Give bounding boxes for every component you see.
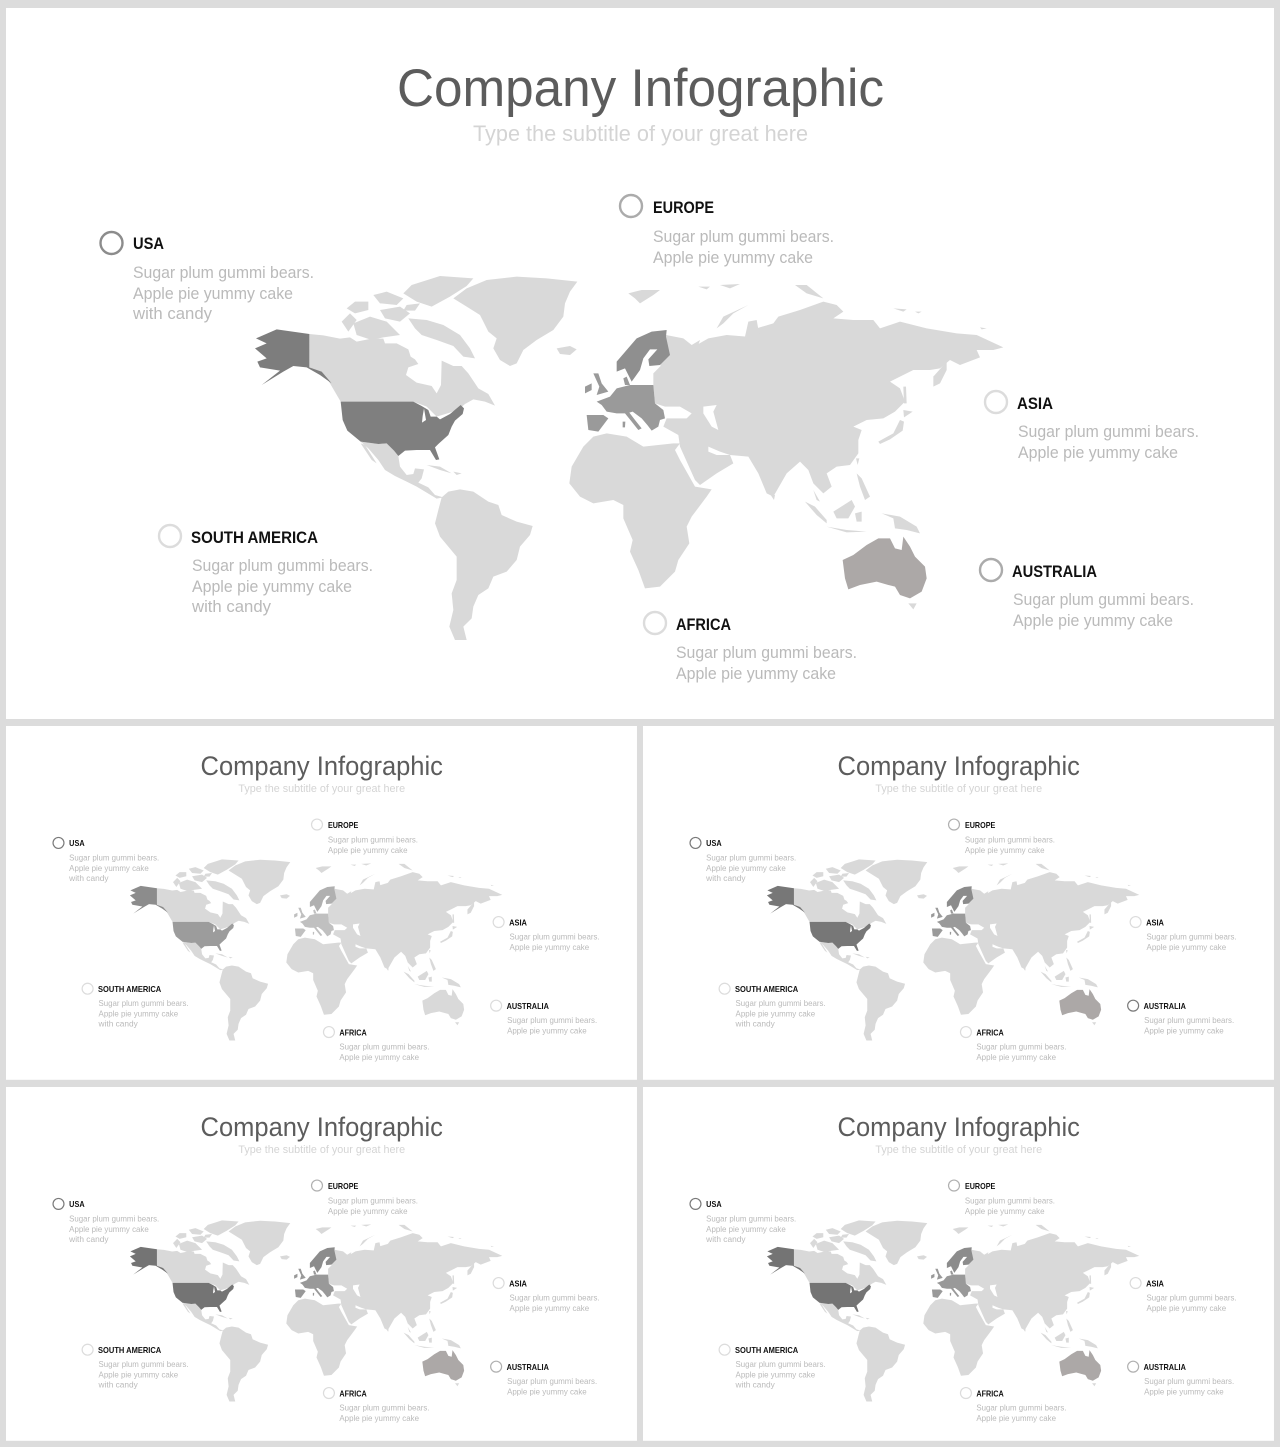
callout: Africa: Sugar plum gummi bears. <box>976 1402 1066 1412</box>
callout: Asia: Sugar plum gummi bears. <box>1147 931 1237 941</box>
callout: South America: with candy <box>735 1019 776 1029</box>
callout: South America: Apple pie yummy cake <box>99 1370 178 1380</box>
panel: small slide top left, USA highlighted <box>6 726 637 1080</box>
callout: Asia: ASIA <box>1146 918 1164 928</box>
callout: USA <box>53 837 159 883</box>
callout: Australia <box>980 559 1194 630</box>
callout: South America: Sugar plum gummi bears. <box>736 1359 826 1369</box>
callout: Africa <box>323 1388 429 1423</box>
callout: South America <box>82 1344 189 1390</box>
callout: USA: Sugar plum gummi bears. <box>133 263 314 282</box>
subtitle: Type the subtitle of your great here <box>238 1144 405 1156</box>
callout: USA <box>690 837 796 883</box>
callout: Asia <box>1130 917 1237 952</box>
callout: USA <box>100 232 314 323</box>
callout: Australia: Apple pie yummy cake <box>1144 1026 1224 1036</box>
callout: USA: Sugar plum gummi bears. <box>706 1213 796 1223</box>
callout: Africa <box>323 1027 429 1062</box>
title: Company Infographic <box>201 1112 443 1142</box>
callout: Australia: AUSTRALIA <box>1144 1001 1186 1011</box>
callout: Europe <box>620 195 834 267</box>
callout: Africa: Sugar plum gummi bears. <box>339 1402 429 1412</box>
callout: Europe <box>312 1180 418 1216</box>
callout: Australia: Apple pie yummy cake <box>1144 1387 1224 1397</box>
callout: Europe: EUROPE <box>328 1181 359 1191</box>
callout: Europe <box>949 1180 1055 1216</box>
callout: South America: SOUTH AMERICA <box>735 1345 798 1355</box>
callout: Africa: AFRICA <box>676 615 731 634</box>
callout: USA: Apple pie yummy cake <box>706 1224 786 1234</box>
callout: South America: Sugar plum gummi bears. <box>736 998 826 1008</box>
callout: South America: Apple pie yummy cake <box>736 1009 815 1019</box>
callout: South America <box>719 983 826 1029</box>
callout: Europe: Apple pie yummy cake <box>653 248 813 267</box>
callout: Asia <box>1130 1278 1237 1313</box>
title: Company Infographic <box>838 751 1080 781</box>
callout: USA: Sugar plum gummi bears. <box>69 852 159 862</box>
callout: Asia <box>985 391 1199 462</box>
callout: Africa: Apple pie yummy cake <box>339 1413 419 1423</box>
callout: Australia: Sugar plum gummi bears. <box>507 1376 597 1386</box>
panel: small slide top right, USA Europe and Australia highlighted <box>643 726 1274 1080</box>
callout: Africa <box>644 612 857 683</box>
callout: USA <box>690 1198 796 1244</box>
callout: Australia: AUSTRALIA <box>1144 1362 1186 1372</box>
callout: Africa <box>960 1388 1066 1423</box>
panel: large slide, USA Europe and Australia highlighted <box>6 8 1274 719</box>
callout: South America: Sugar plum gummi bears. <box>99 998 189 1008</box>
title: Company Infographic <box>838 1112 1080 1142</box>
callout: Europe: Sugar plum gummi bears. <box>965 834 1055 844</box>
callout: USA: Apple pie yummy cake <box>706 863 786 873</box>
callout: USA: Sugar plum gummi bears. <box>69 1213 159 1223</box>
callout: USA: Apple pie yummy cake <box>133 284 293 303</box>
callout: Australia: AUSTRALIA <box>507 1001 549 1011</box>
callout: Africa: AFRICA <box>339 1389 367 1399</box>
callout: USA: USA <box>133 234 164 253</box>
callout: South America: with candy <box>98 1380 139 1390</box>
callout: Africa: AFRICA <box>976 1389 1004 1399</box>
callout: Australia: Apple pie yummy cake <box>1013 611 1173 630</box>
callout: Europe: Apple pie yummy cake <box>965 1206 1045 1216</box>
world map <box>767 859 1139 1040</box>
callout: Europe: EUROPE <box>965 1181 996 1191</box>
callout: South America <box>159 525 373 616</box>
callout: South America: Sugar plum gummi bears. <box>192 556 373 575</box>
callout: South America: with candy <box>735 1380 776 1390</box>
callout: Europe: Sugar plum gummi bears. <box>965 1195 1055 1205</box>
callout: South America: Apple pie yummy cake <box>99 1009 178 1019</box>
callout: Europe: Apple pie yummy cake <box>328 1206 408 1216</box>
callout: USA: USA <box>69 1199 85 1209</box>
callout: South America: SOUTH AMERICA <box>191 528 318 547</box>
callout: Africa <box>960 1027 1066 1062</box>
callout: Africa: AFRICA <box>976 1028 1004 1038</box>
callout: Asia: Sugar plum gummi bears. <box>1018 422 1199 441</box>
subtitle: Type the subtitle of your great here <box>238 783 405 795</box>
callout: Asia: Apple pie yummy cake <box>1147 942 1226 952</box>
callout: Europe: EUROPE <box>965 820 996 830</box>
callout: South America <box>719 1344 826 1390</box>
callout: Africa: Sugar plum gummi bears. <box>676 643 857 662</box>
callout: South America: Apple pie yummy cake <box>192 577 352 596</box>
callout: USA: USA <box>706 1199 722 1209</box>
callout: USA: Apple pie yummy cake <box>69 1224 149 1234</box>
world map <box>130 859 502 1040</box>
callout: Australia <box>1128 1361 1234 1397</box>
subtitle: Type the subtitle of your great here <box>875 1144 1042 1156</box>
callout: Asia <box>493 917 600 952</box>
callout: USA: Apple pie yummy cake <box>69 863 149 873</box>
callout: Australia: Sugar plum gummi bears. <box>507 1015 597 1025</box>
callout: Europe <box>312 819 418 855</box>
panel: small slide bottom left, USA Europe and Australia highlighted <box>6 1087 637 1441</box>
callout: Asia: Apple pie yummy cake <box>510 1303 589 1313</box>
callout: Australia <box>491 1361 597 1397</box>
subtitle: Type the subtitle of your great here <box>473 121 808 146</box>
world map <box>130 1220 502 1401</box>
callout: Australia: Sugar plum gummi bears. <box>1144 1376 1234 1386</box>
callout: Asia: Sugar plum gummi bears. <box>1147 1292 1237 1302</box>
callout: USA: with candy <box>705 873 746 883</box>
callout: Europe: Sugar plum gummi bears. <box>328 834 418 844</box>
callout: South America: Sugar plum gummi bears. <box>99 1359 189 1369</box>
callout: Europe: EUROPE <box>653 198 714 217</box>
subtitle: Type the subtitle of your great here <box>875 783 1042 795</box>
callout: Asia: Sugar plum gummi bears. <box>510 1292 600 1302</box>
callout: South America: SOUTH AMERICA <box>98 984 161 994</box>
callout: Asia: ASIA <box>509 918 527 928</box>
callout: Asia: ASIA <box>1017 394 1053 413</box>
callout: Europe: Apple pie yummy cake <box>965 845 1045 855</box>
callout: USA: with candy <box>705 1234 746 1244</box>
callout: Europe: Sugar plum gummi bears. <box>653 227 834 246</box>
callout: Africa: Sugar plum gummi bears. <box>339 1041 429 1051</box>
callout: USA: with candy <box>132 304 212 323</box>
callout: Asia: ASIA <box>509 1279 527 1289</box>
callout: South America: with candy <box>98 1019 139 1029</box>
title: Company Infographic <box>397 59 884 118</box>
callout: Africa: Apple pie yummy cake <box>339 1052 419 1062</box>
callout: USA: with candy <box>68 873 109 883</box>
callout: Asia: Apple pie yummy cake <box>510 942 589 952</box>
callout: Australia: Apple pie yummy cake <box>507 1026 587 1036</box>
callout: Australia: Sugar plum gummi bears. <box>1013 590 1194 609</box>
callout: Africa: AFRICA <box>339 1028 367 1038</box>
callout: Europe: EUROPE <box>328 820 359 830</box>
callout: Australia: AUSTRALIA <box>507 1362 549 1372</box>
callout: Asia: Apple pie yummy cake <box>1018 443 1178 462</box>
callout: Australia: Apple pie yummy cake <box>507 1387 587 1397</box>
callout: South America: Apple pie yummy cake <box>736 1370 815 1380</box>
world map <box>767 1220 1139 1401</box>
callout: Australia: AUSTRALIA <box>1012 562 1097 581</box>
callout: Australia <box>491 1000 597 1036</box>
callout: Asia: Sugar plum gummi bears. <box>510 931 600 941</box>
callout: Africa: Sugar plum gummi bears. <box>976 1041 1066 1051</box>
world map <box>255 276 1003 640</box>
callout: USA: with candy <box>68 1234 109 1244</box>
callout: Africa: Apple pie yummy cake <box>676 664 836 683</box>
callout: Europe: Apple pie yummy cake <box>328 845 408 855</box>
callout: Africa: Apple pie yummy cake <box>976 1052 1056 1062</box>
callout: Africa: Apple pie yummy cake <box>976 1413 1056 1423</box>
callout: Europe: Sugar plum gummi bears. <box>328 1195 418 1205</box>
callout: Australia: Sugar plum gummi bears. <box>1144 1015 1234 1025</box>
callout: Asia: ASIA <box>1146 1279 1164 1289</box>
callout: Australia <box>1128 1000 1234 1036</box>
callout: USA: USA <box>69 838 85 848</box>
panel: small slide bottom right, USA Europe and Australia highlighted <box>643 1087 1274 1441</box>
callout: USA: USA <box>706 838 722 848</box>
callout: Asia <box>493 1278 600 1313</box>
callout: South America <box>82 983 189 1029</box>
callout: Asia: Apple pie yummy cake <box>1147 1303 1226 1313</box>
callout: South America: SOUTH AMERICA <box>735 984 798 994</box>
callout: USA <box>53 1198 159 1244</box>
title: Company Infographic <box>201 751 443 781</box>
callout: Europe <box>949 819 1055 855</box>
callout: South America: SOUTH AMERICA <box>98 1345 161 1355</box>
callout: USA: Sugar plum gummi bears. <box>706 852 796 862</box>
callout: South America: with candy <box>191 597 271 616</box>
